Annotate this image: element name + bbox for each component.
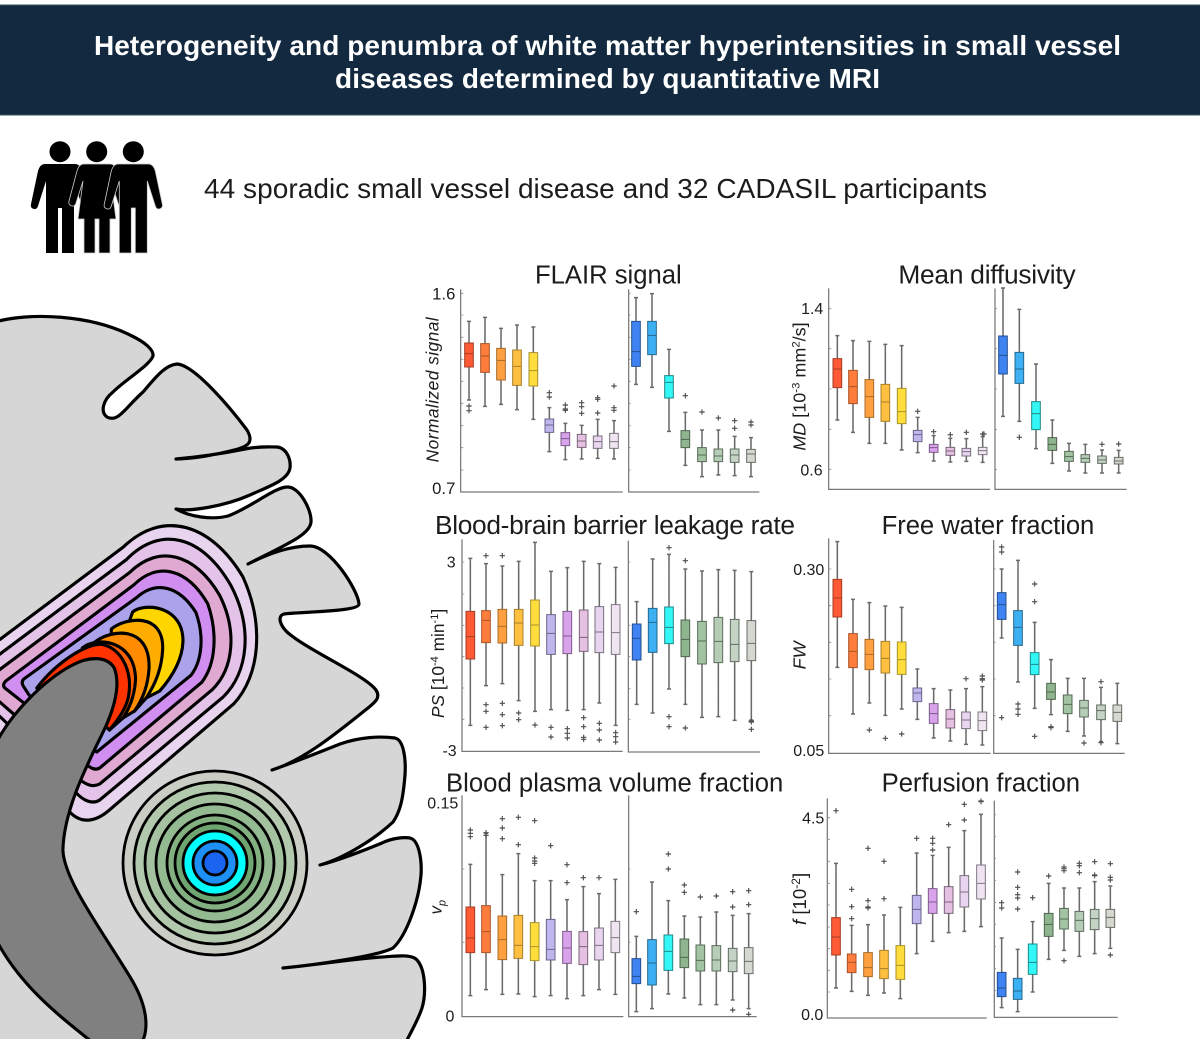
chart title: Perfusion fraction: [882, 770, 1080, 798]
y axis label: min: [428, 623, 448, 656]
chart title: Mean diffusivity: [898, 259, 1076, 289]
y axis tick labels: 0.0: [801, 1007, 823, 1024]
box plots: CADASIL: [632, 545, 756, 732]
y axis label: FW: [790, 639, 810, 669]
box plots: sporadic SVD: [466, 815, 620, 999]
chart: Free water fraction: [790, 512, 1125, 760]
axes: [827, 798, 1118, 1018]
y axis tick labels: [442, 554, 457, 760]
participants text: 44 sporadic small vessel disease and 32 CADASIL participants: [204, 173, 987, 204]
y axis label: /s]: [790, 322, 810, 341]
y axis label: ]: [428, 609, 448, 614]
chart: FLAIR signal: [422, 261, 759, 498]
subcortical lacune contours: [123, 771, 307, 955]
box plots: CADASIL: [632, 294, 755, 477]
y axis label: MD [10: [790, 393, 810, 451]
y axis tick labels: 0.30: [793, 562, 824, 579]
y axis tick labels: 1.4: [801, 301, 823, 318]
box plots: sporadic SVD: [833, 542, 987, 745]
y axis tick labels: 0.7: [432, 479, 455, 498]
y axis tick labels: 4.5: [802, 810, 824, 827]
brain outline with gyri and sulci: [0, 316, 425, 1039]
y axis tick labels: [801, 810, 824, 1024]
chart title: Blood plasma volume fraction: [446, 770, 783, 798]
title banner: diseases determined by quantitative MRI: [335, 63, 880, 94]
y axis tick labels: 0.15: [427, 795, 458, 812]
y axis tick labels: 3: [447, 554, 456, 571]
y axis label: -4: [429, 656, 441, 666]
y axis label: v: [427, 906, 446, 914]
box plots: CADASIL: [999, 288, 1123, 473]
axes: [462, 795, 757, 1017]
illustration: brain cross-section: [0, 316, 425, 1039]
axes: [462, 539, 760, 752]
y axis label: ]: [789, 873, 810, 878]
y axis tick labels: 1.6: [432, 284, 455, 303]
y axis tick labels: -3: [442, 743, 457, 760]
axes: [829, 538, 1125, 753]
y axis label: -1: [429, 614, 441, 623]
y axis tick labels: 0.05: [793, 743, 824, 760]
box plots: CADASIL: [632, 851, 753, 1017]
axes: [829, 288, 1127, 489]
y axis label: PS [10: [428, 666, 448, 718]
y axis tick labels: [427, 795, 458, 1026]
box plots: CADASIL: [997, 859, 1115, 1012]
y axis tick labels: 0.6: [800, 462, 823, 479]
chart title: FLAIR signal: [535, 261, 682, 289]
box plots: sporadic SVD: [466, 542, 620, 745]
periventricular lesion contours and ventricle: [0, 526, 257, 1039]
chart: Mean diffusivity: [790, 259, 1127, 489]
chart title: Blood-brain barrier leakage rate: [435, 510, 795, 540]
y axis tick labels: 0: [445, 1009, 454, 1026]
title banner: Heterogeneity and penumbra of white matter hyperintensities in small vessel: [94, 30, 1121, 61]
y axis label: -2: [789, 878, 803, 889]
y axis tick labels: [432, 284, 455, 498]
title banner: [0, 5, 1200, 115]
box plots: sporadic SVD: [832, 798, 985, 999]
chart: Blood-brain barrier leakage rate: [428, 510, 795, 760]
box plots: CADASIL: [997, 544, 1122, 746]
chart title: Free water fraction: [882, 512, 1094, 540]
y axis tick labels: [793, 562, 824, 760]
chart: Blood plasma volume fraction: [427, 770, 783, 1026]
icon: three people: [31, 141, 162, 253]
axes: [461, 289, 759, 492]
y axis tick labels: [800, 301, 823, 479]
y axis label: p: [437, 900, 449, 907]
y axis label: Normalized signal: [422, 316, 442, 462]
y axis label: mm: [790, 348, 810, 383]
chart: Perfusion fraction: [789, 770, 1118, 1024]
y axis label: 2: [791, 341, 803, 348]
box plots: sporadic SVD: [833, 336, 987, 462]
y axis label: -3: [791, 383, 803, 393]
box plots: sporadic SVD: [465, 317, 618, 460]
y axis label: f [10: [789, 889, 810, 925]
